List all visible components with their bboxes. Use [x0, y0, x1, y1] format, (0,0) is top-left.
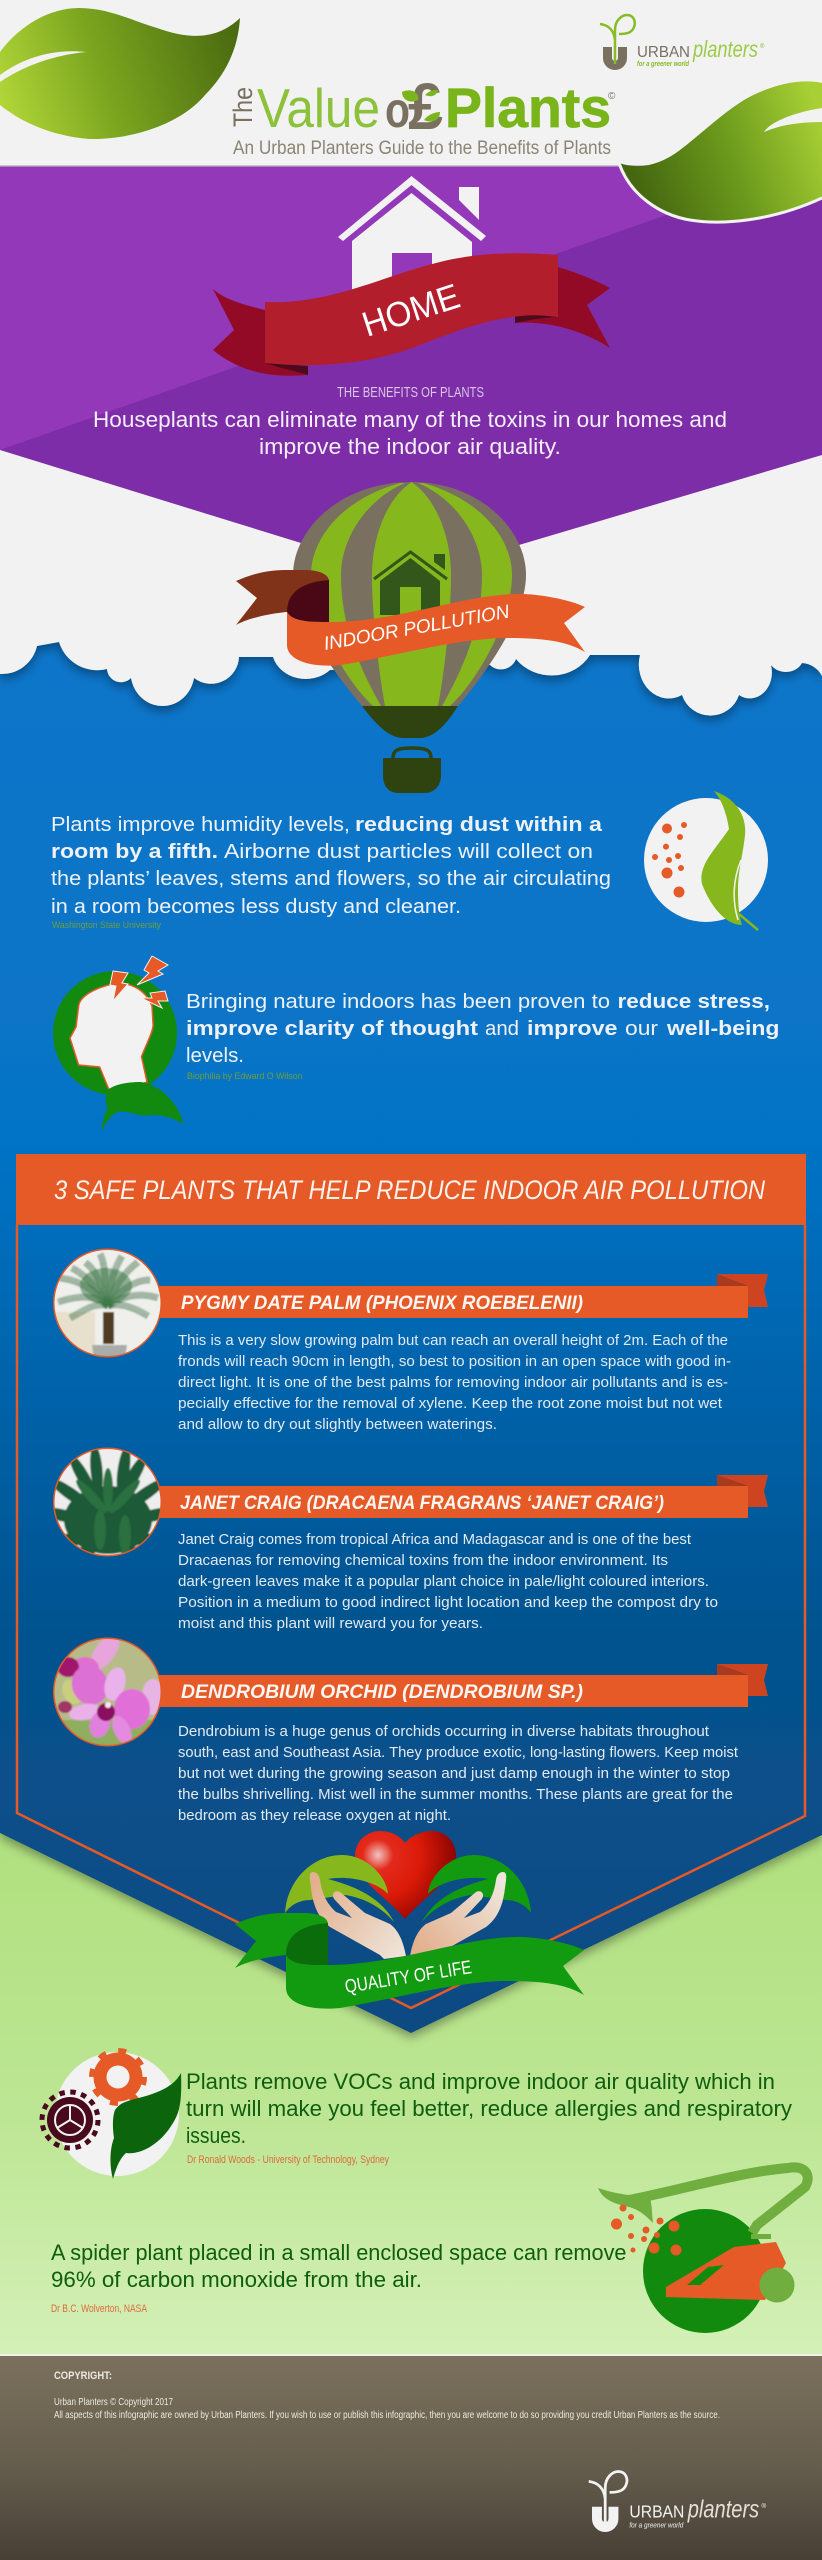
- text: orchid description: [178, 1724, 738, 1824]
- text: dracaena description: [178, 1532, 718, 1632]
- copyright block: Urban Planters © Copyright 2017: [54, 2396, 173, 2408]
- text: palm description: fronds will reach 90cm in length, so best to position in an open space with good in-: [178, 1354, 731, 1370]
- nature text: [186, 991, 780, 1067]
- copyright block: [54, 2370, 720, 2421]
- humidity text: reducing dust within a: [355, 814, 603, 836]
- nature text: and: [485, 1018, 519, 1040]
- nature text: Bringing nature indoors has been proven to: [186, 991, 610, 1013]
- humidity text: room by a fifth.: [51, 841, 218, 863]
- icon: vacuum cleaner: [598, 2167, 808, 2333]
- plants panel heading: [16, 1154, 806, 1225]
- logo top right: [600, 15, 765, 68]
- title: [228, 69, 616, 143]
- plant 1: pygmy date palm: [50, 1248, 768, 1433]
- text: dracaena description: Janet Craig comes from tropical Africa and Madagascar and is one of the best: [178, 1532, 691, 1548]
- text: orchid description: but not wet during the growing season and just damp enough in the winter to stop: [178, 1766, 730, 1782]
- VOC text: turn will make you feel better, reduce allergies and respiratory: [186, 2096, 792, 2121]
- title: ©: [608, 91, 616, 102]
- nature text: levels.: [186, 1045, 244, 1067]
- ribbon: dendrobium: [158, 1664, 768, 1707]
- source: Washington State University: Washington State University: [52, 920, 161, 931]
- logo top right: planters: [692, 36, 758, 62]
- ribbon: janet craig: JANET CRAIG (DRACAENA FRAGRANS ‘JANET CRAIG’): [180, 1493, 664, 1514]
- home statement: Houseplants can eliminate many of the toxins in our homes and: [93, 407, 727, 432]
- spider plant text: A spider plant placed in a small enclosed space can remove: [51, 2240, 626, 2265]
- text: palm description: direct light. It is one of the best palms for removing indoor air pollutants and is es-: [178, 1375, 728, 1391]
- subtitle: An Urban Planters Guide to the Benefits of Plants: [233, 138, 611, 159]
- ribbon: dendrobium: DENDROBIUM ORCHID (DENDROBIUM SP.): [181, 1682, 583, 1703]
- text: palm description: This is a very slow growing palm but can reach an overall height of 2m. Each of the: [178, 1333, 728, 1349]
- ribbon: pygmy date palm: PYGMY DATE PALM (PHOENIX ROEBELENII): [181, 1293, 583, 1314]
- spider plant text: [51, 2240, 626, 2292]
- home statement: improve the indoor air quality.: [259, 434, 561, 459]
- text: dracaena description: Dracaenas for removing chemical toxins from the indoor environment. Its: [178, 1553, 668, 1569]
- humidity text: the plants’ leaves, stems and flowers, so the air circulating: [51, 868, 611, 890]
- icon: stressed head: [53, 956, 184, 1132]
- section label: THE BENEFITS OF PLANTS: [337, 384, 484, 401]
- nature text: improve clarity of thought: [186, 1018, 478, 1040]
- ribbon label: indoor pollution: INDOOR POLLUTION: [322, 602, 511, 655]
- photo: dracaena: [53, 1448, 160, 1556]
- balloon basket: [383, 748, 441, 793]
- ribbon: janet craig: [158, 1475, 768, 1518]
- logo footer: planters: [687, 2496, 759, 2524]
- humidity text: [51, 814, 611, 918]
- balloon house icon: [374, 552, 447, 615]
- logo footer: for a greener world: [629, 2521, 684, 2530]
- icon: gears and leaf: [42, 2051, 181, 2179]
- spider plant text: 96% of carbon monoxide from the air.: [51, 2267, 422, 2292]
- nature text: improve: [527, 1018, 618, 1040]
- title: The: [228, 87, 258, 127]
- VOC text: Plants remove VOCs and improve indoor air quality which in: [186, 2069, 775, 2094]
- copyright block: COPYRIGHT:: [54, 2370, 112, 2382]
- title: o: [385, 82, 410, 138]
- text: palm description: and allow to dry out slightly between waterings.: [178, 1417, 497, 1433]
- VOC text: issues.: [186, 2123, 246, 2148]
- humidity text: Airborne dust particles will collect on: [224, 841, 593, 863]
- logo top right: for a greener world: [637, 61, 690, 68]
- icon: house: [338, 176, 486, 300]
- leaf top right: [619, 81, 822, 222]
- photo: palm: [50, 1248, 166, 1358]
- indoor pollution ribbon: [236, 570, 585, 666]
- green section background: [0, 1800, 822, 2355]
- logo footer: [589, 2472, 766, 2530]
- photo: orchid: [53, 1638, 160, 1746]
- hot air balloon: [293, 482, 526, 793]
- ribbon label: home: HOME: [357, 277, 465, 345]
- purple home panel: [0, 166, 822, 577]
- text: orchid description: Dendrobium is a huge genus of orchids occurring in diverse habitats throughout: [178, 1724, 709, 1740]
- text: orchid description: south, east and Southeast Asia. They produce exotic, long-lasting flowers. Keep moist: [178, 1745, 738, 1761]
- logo footer: ®: [761, 2502, 766, 2510]
- humidity text: Plants improve humidity levels,: [51, 814, 350, 836]
- quality of life ribbon: [235, 1913, 584, 2009]
- nature text: reduce stress,: [618, 991, 770, 1013]
- plants panel outline: [17, 1225, 805, 2008]
- title: Value: [257, 77, 380, 139]
- icon: heart in hands: [285, 1831, 531, 1959]
- paper clouds band: [0, 430, 822, 716]
- icon: dust and leaf: [644, 791, 768, 930]
- text: palm description: [178, 1333, 731, 1433]
- plant 2: janet craig: [35, 1445, 768, 1632]
- title: Plants: [445, 76, 611, 139]
- blue section with chevron bottom: [0, 600, 822, 2033]
- humidity text: in a room becomes less dusty and cleaner.: [51, 896, 461, 918]
- plant 3: dendrobium orchid: [50, 1630, 768, 1824]
- nature text: our: [625, 1018, 658, 1040]
- logo top right: URBAN: [637, 44, 690, 61]
- ribbon: pygmy date palm: [158, 1274, 768, 1318]
- text: dracaena description: dark-green leaves make it a popular plant choice in pale/light coloured interiors.: [178, 1574, 709, 1590]
- leaf top left: [0, 8, 240, 139]
- source: Dr B.C. Wolverton: Dr B.C. Wolverton, NASA: [51, 2303, 148, 2315]
- text: orchid description: the bulbs shrivelling. Mist well in the summer months. These plants are great for the: [178, 1787, 733, 1803]
- logo footer: URBAN: [629, 2502, 684, 2522]
- nature text: well-being: [666, 1018, 780, 1040]
- header paper: [0, 0, 822, 166]
- ribbon label: quality of life: QUALITY OF LIFE: [343, 1957, 473, 1998]
- title: £: [408, 69, 443, 143]
- source: Biophilia: Biophilia by Edward O Wilson: [187, 1071, 302, 1082]
- text: orchid description: bedroom as they release oxygen at night.: [178, 1808, 451, 1824]
- footer background: [0, 2355, 822, 2560]
- VOC text: [186, 2069, 792, 2148]
- text: palm description: pecially effective for the removal of xylene. Keep the root zone moist but not wet: [178, 1396, 722, 1412]
- source: Dr Ronald Woods: Dr Ronald Woods - University of Technology, Sydney: [187, 2154, 389, 2166]
- home ribbon: [213, 253, 610, 376]
- logo top right: ®: [760, 43, 765, 50]
- text: dracaena description: moist and this plant will reward you for years.: [178, 1616, 483, 1632]
- text: dracaena description: Position in a medium to good indirect light location and keep the compost dry to: [178, 1595, 718, 1611]
- home statement: [93, 407, 727, 459]
